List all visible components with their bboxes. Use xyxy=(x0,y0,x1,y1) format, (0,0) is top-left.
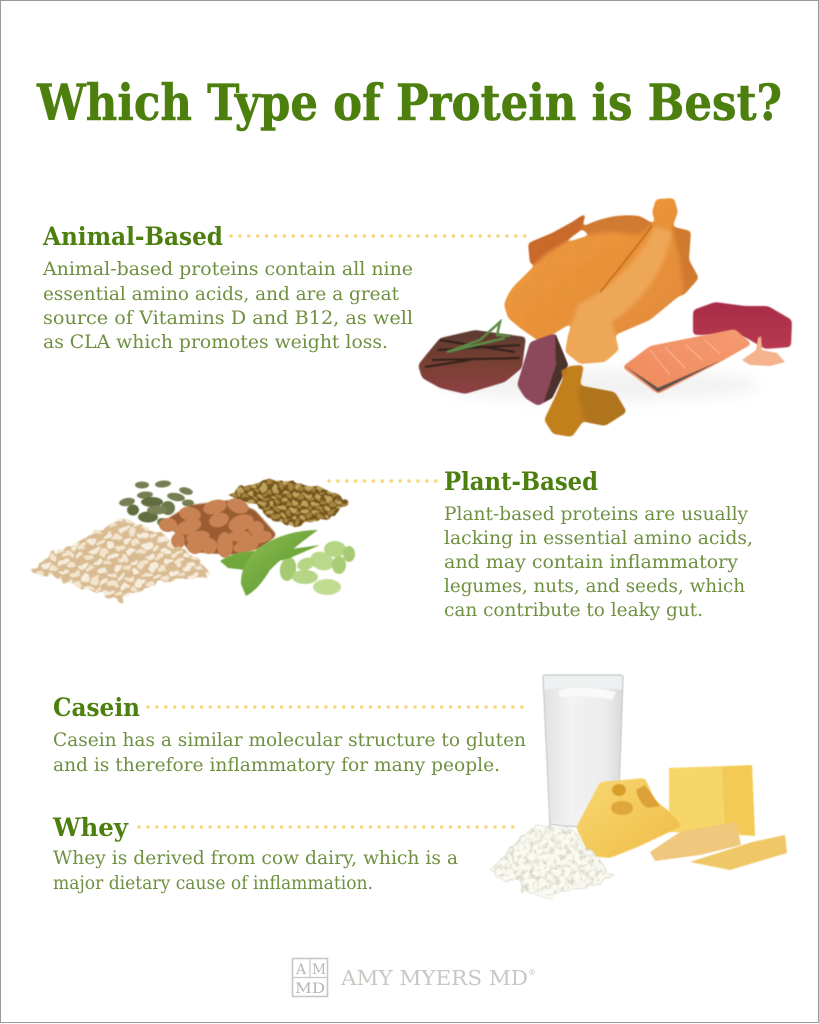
icon: salmon fillet xyxy=(622,329,752,394)
icon: AM MD monogram: MD xyxy=(295,981,325,997)
dotted leader: whey xyxy=(139,825,513,829)
body text: plant-based: Plant-based proteins are usually xyxy=(444,503,748,525)
wordmark: AMY MYERS MD xyxy=(340,966,528,990)
dotted leader: plant-based xyxy=(329,479,436,483)
registered mark: ® xyxy=(528,968,536,977)
illustration: animal proteins xyxy=(418,198,792,437)
icon: pumpkin seeds xyxy=(118,480,194,526)
icon: cheese slice xyxy=(690,835,787,870)
body text: animal-based: Animal-based proteins contain all nine xyxy=(42,258,413,280)
panel: animal-based text xyxy=(42,222,528,353)
icon: AM MD monogram: M xyxy=(312,962,326,978)
icon: chicken drumsticks xyxy=(544,365,627,437)
icon: rolled oats xyxy=(33,519,213,603)
body text: whey: Whey is derived from cow dairy, which is a xyxy=(53,847,458,869)
icon: AM MD monogram xyxy=(292,958,328,997)
icon: tuna steak xyxy=(693,302,792,349)
icon: lentils xyxy=(228,481,349,526)
icon: cottage cheese xyxy=(489,826,613,898)
illustration: plant proteins xyxy=(33,480,355,603)
icon: roast chicken xyxy=(504,198,699,364)
icon: swiss cheese wedge xyxy=(576,778,682,858)
logo: Amy Myers MD xyxy=(292,958,536,997)
icon: shrimp xyxy=(742,336,785,366)
heading: whey: Whey xyxy=(52,813,129,843)
body text: animal-based: essential amino acids, and are a great xyxy=(43,283,399,305)
body text: plant-based: legumes, nuts, and seeds, which xyxy=(444,575,745,597)
dotted leader: animal-based xyxy=(231,234,528,238)
illustration: dairy xyxy=(489,675,787,898)
heading: animal-based: Animal-Based xyxy=(42,222,223,252)
body text: plant-based: can contribute to leaky gut. xyxy=(444,599,703,621)
body text: plant-based xyxy=(444,503,753,621)
body text: whey xyxy=(53,847,458,894)
dotted leader: casein xyxy=(148,705,530,709)
panel: whey text xyxy=(52,813,513,894)
icon: edamame beans xyxy=(220,530,355,596)
body text: casein xyxy=(53,729,526,776)
panel: casein text xyxy=(53,693,530,776)
panel: plant-based text xyxy=(329,467,753,621)
body text: animal-based xyxy=(42,258,413,353)
body text: plant-based: lacking in essential amino acids, xyxy=(444,527,753,549)
icon: block of yellow cheese xyxy=(669,765,755,836)
heading: casein: Casein xyxy=(53,693,140,723)
icon: AM MD monogram: A xyxy=(295,962,307,978)
body text: whey: major dietary cause of inflammation. xyxy=(53,872,373,894)
icon: grilled steak xyxy=(418,322,568,406)
body text: animal-based: source of Vitamins D and B12, as well xyxy=(43,307,413,329)
icon: almonds xyxy=(159,496,277,558)
body text: casein: Casein has a similar molecular structure to gluten xyxy=(53,729,526,751)
icon: parmesan chunk xyxy=(650,822,741,861)
body text: animal-based: as CLA which promotes weight loss. xyxy=(43,331,388,353)
body text: plant-based: and may contain inflammatory xyxy=(444,551,738,573)
heading: plant-based: Plant-Based xyxy=(444,467,598,497)
icon: glass of milk xyxy=(543,675,623,827)
body text: casein: and is therefore inflammatory for many people. xyxy=(53,754,500,776)
